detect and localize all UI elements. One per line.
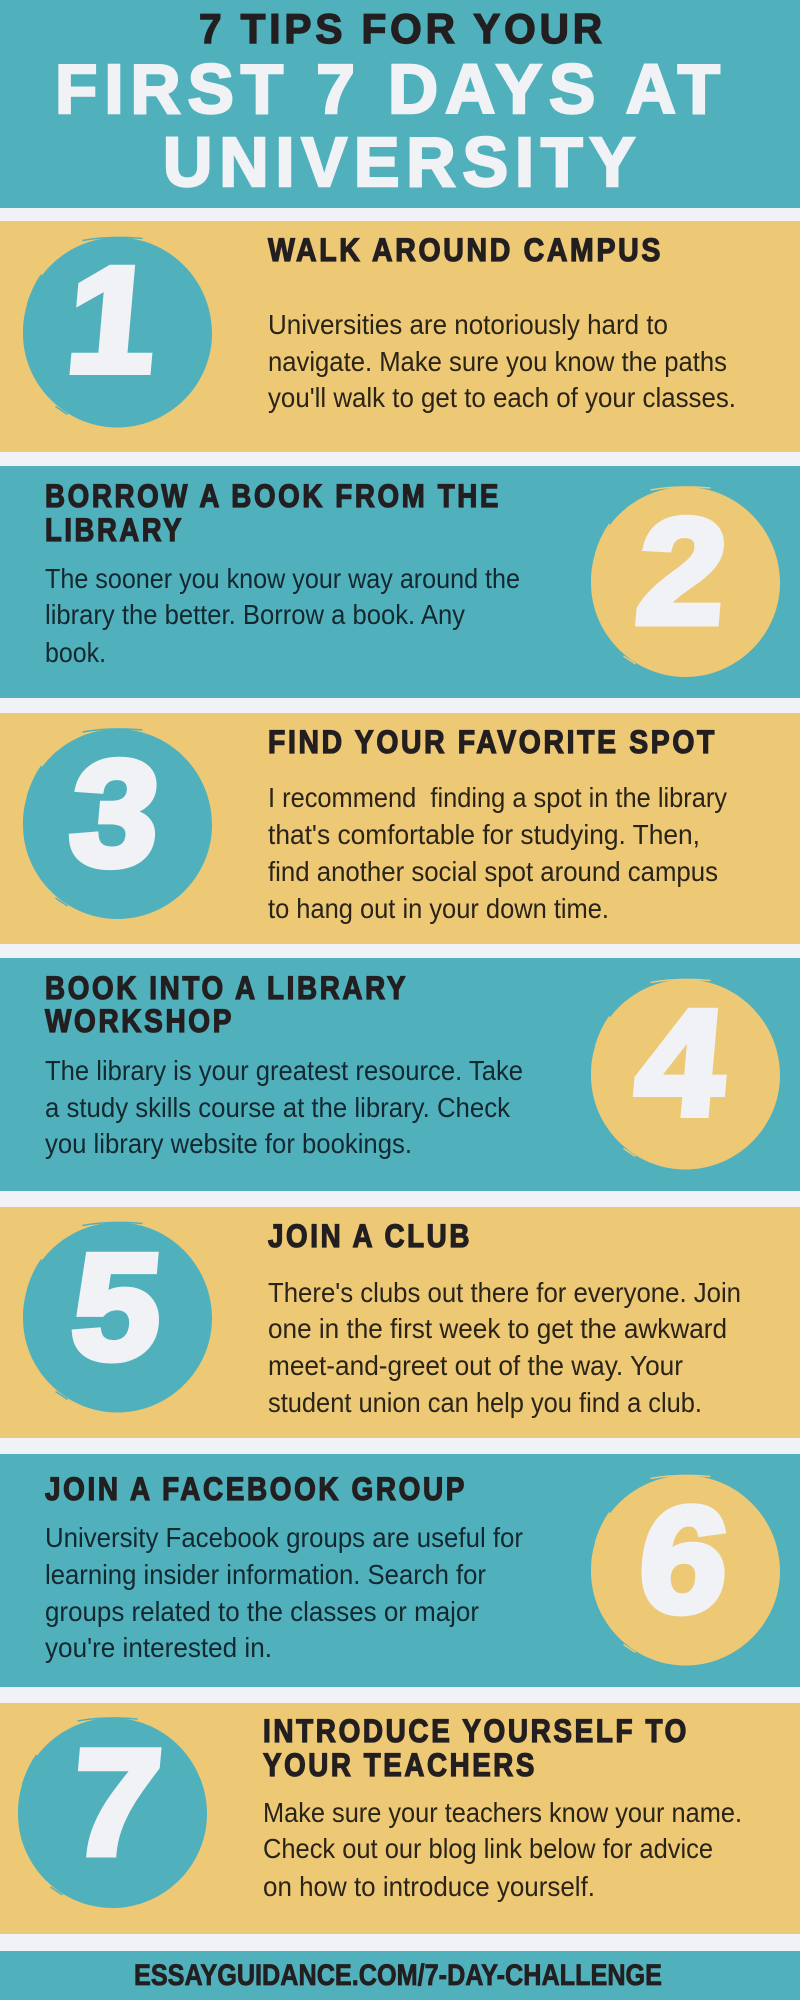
- number badge 2: [591, 487, 780, 677]
- panel: tip 4: [0, 958, 800, 1191]
- heading: WALK AROUND CAMPUS: [268, 232, 663, 268]
- body text: a study skills course at the library. Check: [45, 1092, 511, 1123]
- footer link text: ESSAYGUIDANCE.COM/7-DAY-CHALLENGE: [134, 1959, 662, 1992]
- heading: FIND YOUR FAVORITE SPOT: [268, 724, 717, 760]
- heading: [45, 478, 501, 548]
- panel: tip 7: [0, 1703, 800, 1934]
- number badge 6: 6: [633, 1476, 735, 1643]
- heading: BOOK INTO A LIBRARY: [45, 970, 408, 1006]
- body text: Make sure your teachers know your name.: [263, 1797, 742, 1828]
- number badge 5: 5: [66, 1223, 168, 1390]
- heading: [263, 1713, 689, 1783]
- panel: tip 3: [0, 713, 800, 944]
- body text: library the better. Borrow a book. Any: [45, 599, 465, 630]
- body text: Universities are notoriously hard to: [268, 309, 668, 340]
- heading: LIBRARY: [45, 512, 184, 548]
- number badge 5: [23, 1222, 212, 1412]
- panel: tip 2: [0, 466, 800, 698]
- number badge 1: 1: [61, 236, 163, 403]
- body text: to hang out in your down time.: [268, 893, 609, 924]
- body text: Check out our blog link below for advice: [263, 1833, 713, 1864]
- heading: JOIN A CLUB: [268, 1218, 472, 1254]
- body text: groups related to the classes or major: [45, 1596, 479, 1627]
- body text: find another social spot around campus: [268, 856, 718, 887]
- number badge 3: [23, 729, 212, 919]
- body text: University Facebook groups are useful for: [45, 1522, 523, 1553]
- body text: The sooner you know your way around the: [45, 563, 520, 594]
- number badge 2: 2: [631, 487, 733, 655]
- body text: [263, 1797, 742, 1902]
- body text: [268, 309, 736, 413]
- heading: [45, 970, 408, 1039]
- body text: meet-and-greet out of the way. Your: [268, 1350, 683, 1381]
- number badge 3: 3: [64, 729, 166, 897]
- heading: YOUR TEACHERS: [263, 1747, 537, 1783]
- panel: header: [0, 0, 800, 208]
- number badge 4: [591, 979, 780, 1170]
- body text: on how to introduce yourself.: [263, 1871, 595, 1902]
- body text: student union can help you find a club.: [268, 1387, 702, 1418]
- number badge 6: [591, 1475, 780, 1666]
- body text: you'll walk to get to each of your classes.: [268, 382, 736, 413]
- title: main line two: UNIVERSITY: [163, 123, 642, 201]
- body text: navigate. Make sure you know the paths: [268, 346, 727, 377]
- body text: [45, 1522, 523, 1663]
- body text: that's comfortable for studying. Then,: [268, 819, 700, 850]
- title: main line one: FIRST 7 DAYS AT: [55, 50, 727, 128]
- body text: [268, 1277, 741, 1418]
- heading: WORKSHOP: [45, 1003, 234, 1039]
- panel: tip 1: [0, 221, 800, 452]
- title: small line: 7 TIPS FOR YOUR: [199, 5, 606, 52]
- body text: you library website for bookings.: [45, 1128, 412, 1159]
- body text: you're interested in.: [45, 1632, 272, 1663]
- panel: tip 5: [0, 1207, 800, 1438]
- body text: [45, 563, 520, 668]
- body text: The library is your greatest resource. Take: [45, 1055, 523, 1086]
- heading: INTRODUCE YOURSELF TO: [263, 1713, 689, 1749]
- number badge 1: [23, 236, 212, 428]
- panel: tip 6: [0, 1454, 800, 1687]
- number badge 4: 4: [630, 979, 732, 1146]
- heading: JOIN A FACEBOOK GROUP: [45, 1471, 467, 1507]
- heading: BORROW A BOOK FROM THE: [45, 478, 501, 514]
- number badge 7: [18, 1718, 207, 1908]
- body text: [45, 1055, 523, 1159]
- number badge 7: 7: [65, 1718, 167, 1886]
- panel: footer: [0, 1951, 800, 2000]
- body text: learning insider information. Search for: [45, 1559, 486, 1590]
- body text: book.: [45, 637, 106, 668]
- body text: one in the first week to get the awkward: [268, 1313, 727, 1344]
- body text: There's clubs out there for everyone. Join: [268, 1277, 741, 1308]
- body text: I recommend finding a spot in the library: [268, 782, 727, 813]
- body text: [268, 782, 727, 924]
